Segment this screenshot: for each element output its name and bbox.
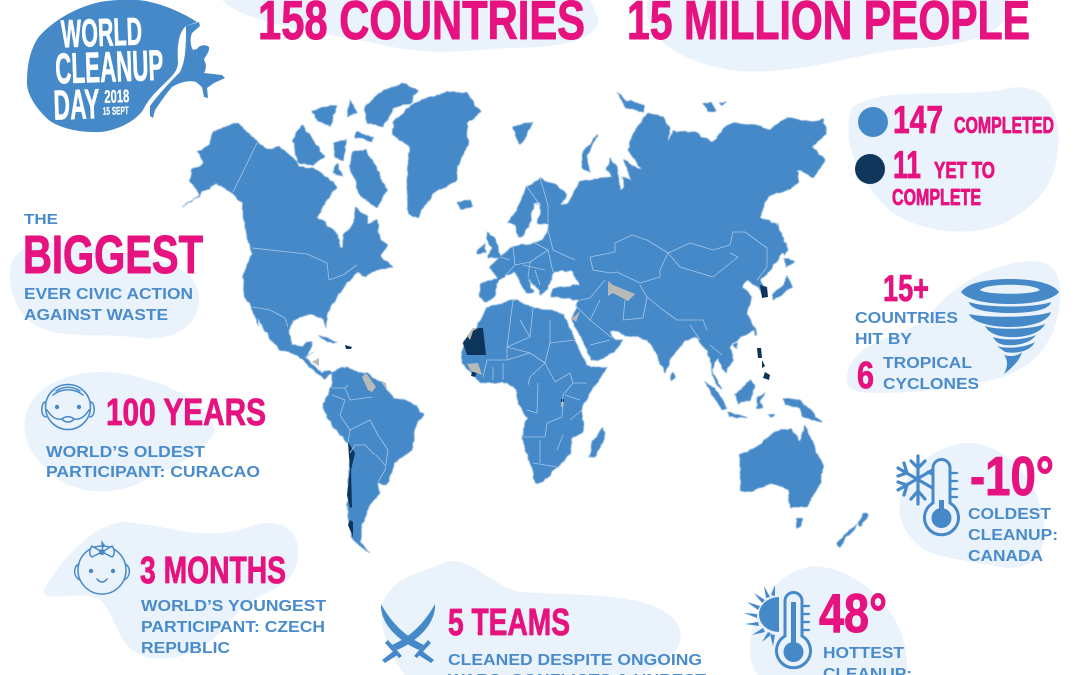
100 years description: WORLD’S OLDEST xyxy=(46,444,205,461)
biggest heading: BIGGEST xyxy=(23,225,203,285)
hottest heading: 48° xyxy=(819,582,887,644)
the label: THE xyxy=(24,211,58,228)
5 teams description: CLEANED DESPITE ONGOING xyxy=(448,652,702,669)
panel: 3 months: PARTICIPANT: CZECH xyxy=(141,619,325,636)
Sakhalin and Japan xyxy=(775,223,787,256)
Madagascar xyxy=(590,427,605,457)
icon: sun xyxy=(744,585,779,646)
100 years heading: 100 YEARS xyxy=(106,392,266,434)
legend: 147 number: 147 xyxy=(893,99,943,142)
panel: 100 years xyxy=(42,384,266,481)
legend: yet to label: YET TO xyxy=(934,157,995,183)
panel: tropical cyclones: TROPICAL xyxy=(883,355,972,372)
Greenland xyxy=(393,92,480,218)
5 teams heading: 5 TEAMS xyxy=(448,602,570,644)
Eurasia xyxy=(480,113,827,390)
panel: coldest cleanup: CLEANUP: xyxy=(968,527,1058,544)
panel: legend xyxy=(855,99,1054,210)
logo text xyxy=(50,10,165,129)
logo text: DAY xyxy=(53,80,100,129)
Arctic Eurasia islands xyxy=(582,135,598,172)
countries yet to complete (navy) xyxy=(345,285,770,537)
panel: 3 months: REPUBLIC xyxy=(141,640,230,657)
panel: tropical cyclones: HIT BY xyxy=(855,331,912,348)
15+ number: 15+ xyxy=(883,268,929,309)
Arctic islands xyxy=(350,150,387,208)
icon: snowflake xyxy=(898,456,936,504)
New Zealand xyxy=(858,513,868,527)
Southeast Asia islands xyxy=(705,382,727,410)
South America xyxy=(323,367,423,552)
logo climber figure xyxy=(150,22,225,118)
legend: complete label: COMPLETE xyxy=(892,184,981,210)
hottest description: HOTTEST xyxy=(823,645,904,662)
logo text: 2018 xyxy=(104,86,130,107)
Cuba and Caribbean xyxy=(318,336,338,343)
legend dot: yet to complete xyxy=(855,154,885,184)
panel: coldest cleanup xyxy=(898,445,1058,565)
panel: 5 teams xyxy=(381,602,706,675)
panel: coldest cleanup: CANADA xyxy=(968,548,1043,565)
panel: tropical cyclones: CYCLONES xyxy=(883,376,979,393)
logo text: WORLD xyxy=(60,11,143,56)
icon: cold thermometer xyxy=(924,460,959,535)
icon: old man face xyxy=(42,384,94,430)
logo text: CLEANUP xyxy=(54,42,164,94)
UK and Ireland xyxy=(487,232,500,258)
6 number: 6 xyxy=(857,355,874,397)
icon: crossed swords xyxy=(381,604,435,663)
legend dot: completed xyxy=(858,107,888,137)
biggest description: EVER CIVIC ACTION xyxy=(24,286,193,303)
panel: biggest civic action: AGAINST WASTE xyxy=(24,307,168,324)
icon: tornado xyxy=(961,279,1059,374)
logo blob xyxy=(27,0,197,132)
cyclone description: COUNTRIES xyxy=(855,310,958,327)
coldest heading: -10° xyxy=(970,445,1054,507)
icon: baby face xyxy=(75,540,129,594)
icon: hot thermometer xyxy=(776,592,810,668)
legend: 11 number: 11 xyxy=(893,144,921,187)
panel: biggest civic action xyxy=(23,211,203,324)
coldest description: COLDEST xyxy=(968,506,1051,523)
3 months description: WORLD’S YOUNGEST xyxy=(141,598,326,615)
completed countries xyxy=(182,83,868,552)
logo text: 15 SEPT xyxy=(103,105,129,118)
logo: World Cleanup Day 2018 xyxy=(27,0,225,132)
panel: tropical cyclones xyxy=(855,268,1059,397)
world map xyxy=(182,83,868,552)
North and Central America xyxy=(182,123,392,378)
3 months heading: 3 MONTHS xyxy=(140,550,286,592)
panel: 3 months xyxy=(75,540,326,657)
Africa xyxy=(462,300,607,483)
countries with no data (grey) xyxy=(312,281,635,407)
Australia xyxy=(740,425,823,507)
panel: 100 years: PARTICIPANT: CURACAO xyxy=(46,464,260,481)
panel: hottest cleanup xyxy=(744,582,912,675)
country borders xyxy=(233,143,767,482)
Iceland xyxy=(457,200,472,210)
